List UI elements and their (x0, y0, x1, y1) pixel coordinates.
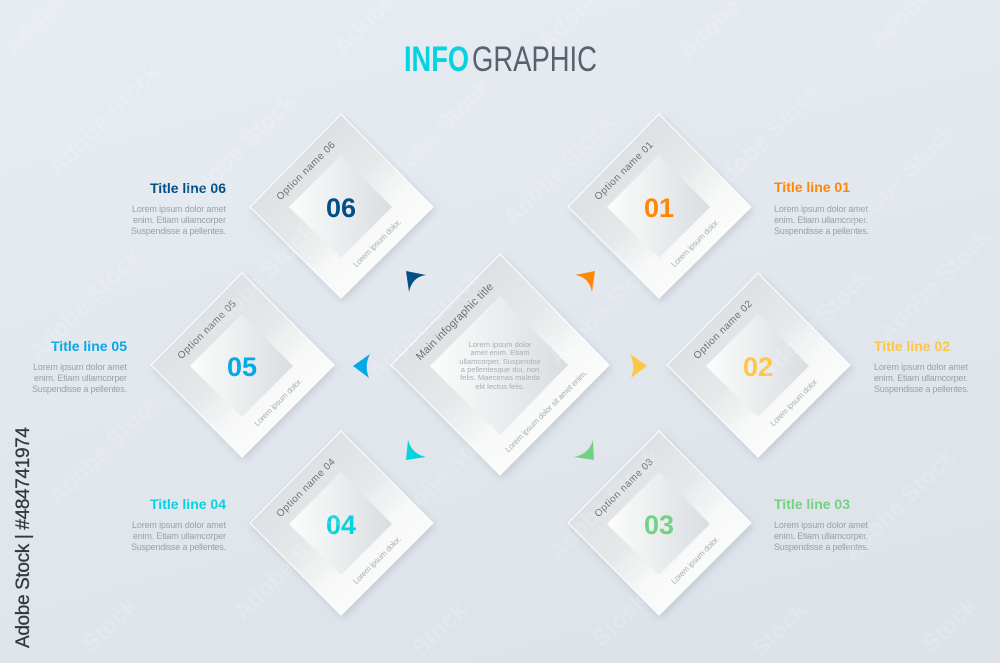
arrow: to 02 (630, 354, 647, 378)
text block 04: Lorem ipsum dolor amet (132, 520, 226, 530)
watermark pattern: Adobe Stock (228, 503, 352, 626)
watermark pattern: Stock (917, 592, 983, 657)
watermark pattern: Adobe Stock (838, 118, 962, 241)
option label 04: Option name 04 (275, 456, 338, 520)
number 01: 01 (644, 193, 674, 223)
text block 05: enim. Etiam ullamcorper (34, 373, 127, 383)
central caption: Lorem ipsum dolor sit amet enim. (503, 368, 589, 454)
option label 03: Option name 03 (593, 456, 656, 520)
title: INFO (404, 40, 469, 79)
text block 03: Suspendisse a pellentes. (774, 542, 869, 552)
text block 06: Lorem ipsum dolor amet (132, 204, 226, 214)
watermark pattern: Stock (407, 597, 473, 662)
watermark pattern: Adobe Stock (383, 413, 507, 536)
watermark pattern: Adobe Stock (43, 388, 167, 511)
central paragraph: felis. Maecenas maleda (460, 373, 541, 382)
watermark pattern: Adobe Stock (873, 223, 997, 346)
text block 03: Lorem ipsum dolor amet (774, 520, 868, 530)
caption 05: Lorem ipsum dolor. (252, 376, 304, 428)
text block 06: Title line 06 (150, 180, 226, 196)
text block 05: Title line 05 (51, 338, 127, 354)
text block 06: enim. Etiam ullamcorper (133, 215, 226, 225)
watermark pattern: Adobe Stock (373, 73, 497, 196)
central paragraph: Lorem ipsum dolor (469, 340, 532, 349)
text block 03: enim. Etiam ullamcorper. (774, 531, 868, 541)
caption 06: Lorem ipsum dolor. (351, 217, 403, 269)
title: GRAPHIC (472, 40, 597, 79)
caption 02: Lorem ipsum dolor. (768, 376, 820, 428)
caption 03: Lorem ipsum dolor. (669, 534, 721, 586)
central paragraph: elit lectus felis. (475, 382, 525, 391)
inner diamond 01 (607, 155, 710, 258)
watermark pattern: Adobe Stock (178, 88, 302, 211)
number 03: 03 (644, 510, 674, 540)
watermark pattern: Stock (77, 592, 143, 657)
option label 06: Option name 06 (275, 139, 338, 203)
watermark pattern: Stock (587, 587, 653, 652)
panel: option 01 (568, 114, 751, 298)
caption 04: Lorem ipsum dolor. (351, 534, 403, 586)
arrow: to 03 (574, 440, 594, 460)
text block 01: enim. Etiam ullamcorper. (774, 215, 868, 225)
text block 04: Suspendisse a pellentes. (131, 542, 226, 552)
text block 03: Title line 03 (774, 496, 850, 512)
option label 01: Option name 01 (593, 139, 656, 203)
watermark pattern: Adobe Stock (43, 58, 167, 181)
option label 02: Option name 02 (692, 298, 755, 362)
central paragraph: ullamcorper. Suspendse (459, 357, 541, 366)
watermark pattern: Stock (747, 597, 813, 662)
watermark pattern: Adobe Stock (23, 243, 147, 366)
text block 03 (774, 496, 869, 552)
inner diamond 05 (190, 314, 293, 417)
text block 01: Title line 01 (774, 179, 850, 195)
text block 02: Lorem ipsum dolor amet (874, 362, 968, 372)
watermark pattern: Adobe Stock (753, 263, 877, 386)
stock id label: Adobe Stock | #484741974 (13, 427, 34, 648)
number 06: 06 (326, 193, 356, 223)
number 02: 02 (743, 352, 773, 382)
text block 04: enim. Etiam ullamcorper (133, 531, 226, 541)
central paragraph: amet enim. Etiam (470, 348, 530, 357)
text block 02: Title line 02 (874, 338, 950, 354)
text block 01: Suspendisse a pellentes. (774, 226, 869, 236)
watermark pattern: Adobe Stock (703, 78, 827, 201)
inner diamond 02 (706, 314, 809, 417)
watermark pattern: Adobe Stock (543, 248, 667, 371)
central inner diamond (430, 296, 568, 435)
option label 05: Option name 05 (176, 298, 239, 362)
watermark pattern: Adobe Stock (498, 108, 622, 231)
number 04: 04 (326, 510, 356, 540)
arrow: to 05 (353, 354, 370, 378)
text block 05: Lorem ipsum dolor amet (33, 362, 127, 372)
text block 05: Suspendisse a pellentes. (32, 384, 127, 394)
arrow: to 01 (575, 271, 595, 292)
title (404, 40, 597, 79)
central paragraph (459, 340, 541, 391)
panel: option 06 (250, 114, 433, 298)
text block 01: Lorem ipsum dolor amet (774, 204, 868, 214)
panel: option 02 (667, 273, 850, 457)
central paragraph: a pellentesque dui, non (461, 365, 539, 374)
text block 01 (774, 179, 869, 236)
panel: option 04 (250, 431, 433, 615)
inner diamond 04 (289, 472, 392, 575)
text block 04: Title line 04 (150, 496, 226, 512)
text block 04 (131, 496, 226, 552)
text block 06: Suspendisse a pellentes. (131, 226, 226, 236)
inner diamond 03 (607, 472, 710, 575)
central label: Main infographic title (414, 281, 496, 363)
watermark pattern: Adobe Stock (543, 443, 667, 566)
text block 06 (131, 180, 226, 236)
text block 02: enim. Etiam ullamcorper. (874, 373, 968, 383)
watermark pattern: Adobe Stock (198, 218, 322, 341)
panel: option 03 (568, 431, 751, 615)
arrow: to 04 (406, 440, 426, 460)
panel: central diamond (391, 254, 609, 475)
number 05: 05 (227, 352, 257, 382)
text block 02 (874, 338, 969, 394)
panel: option 05 (151, 273, 334, 457)
text block 05 (32, 338, 127, 394)
watermark pattern: Adobe Stock (838, 443, 962, 566)
caption 01: Lorem ipsum dolor. (669, 217, 721, 269)
watermark pattern: Adobe Stock (363, 263, 487, 386)
arrow: to 06 (406, 271, 426, 292)
text block 02: Suspendisse a pellentes. (874, 384, 969, 394)
inner diamond 06 (289, 155, 392, 258)
